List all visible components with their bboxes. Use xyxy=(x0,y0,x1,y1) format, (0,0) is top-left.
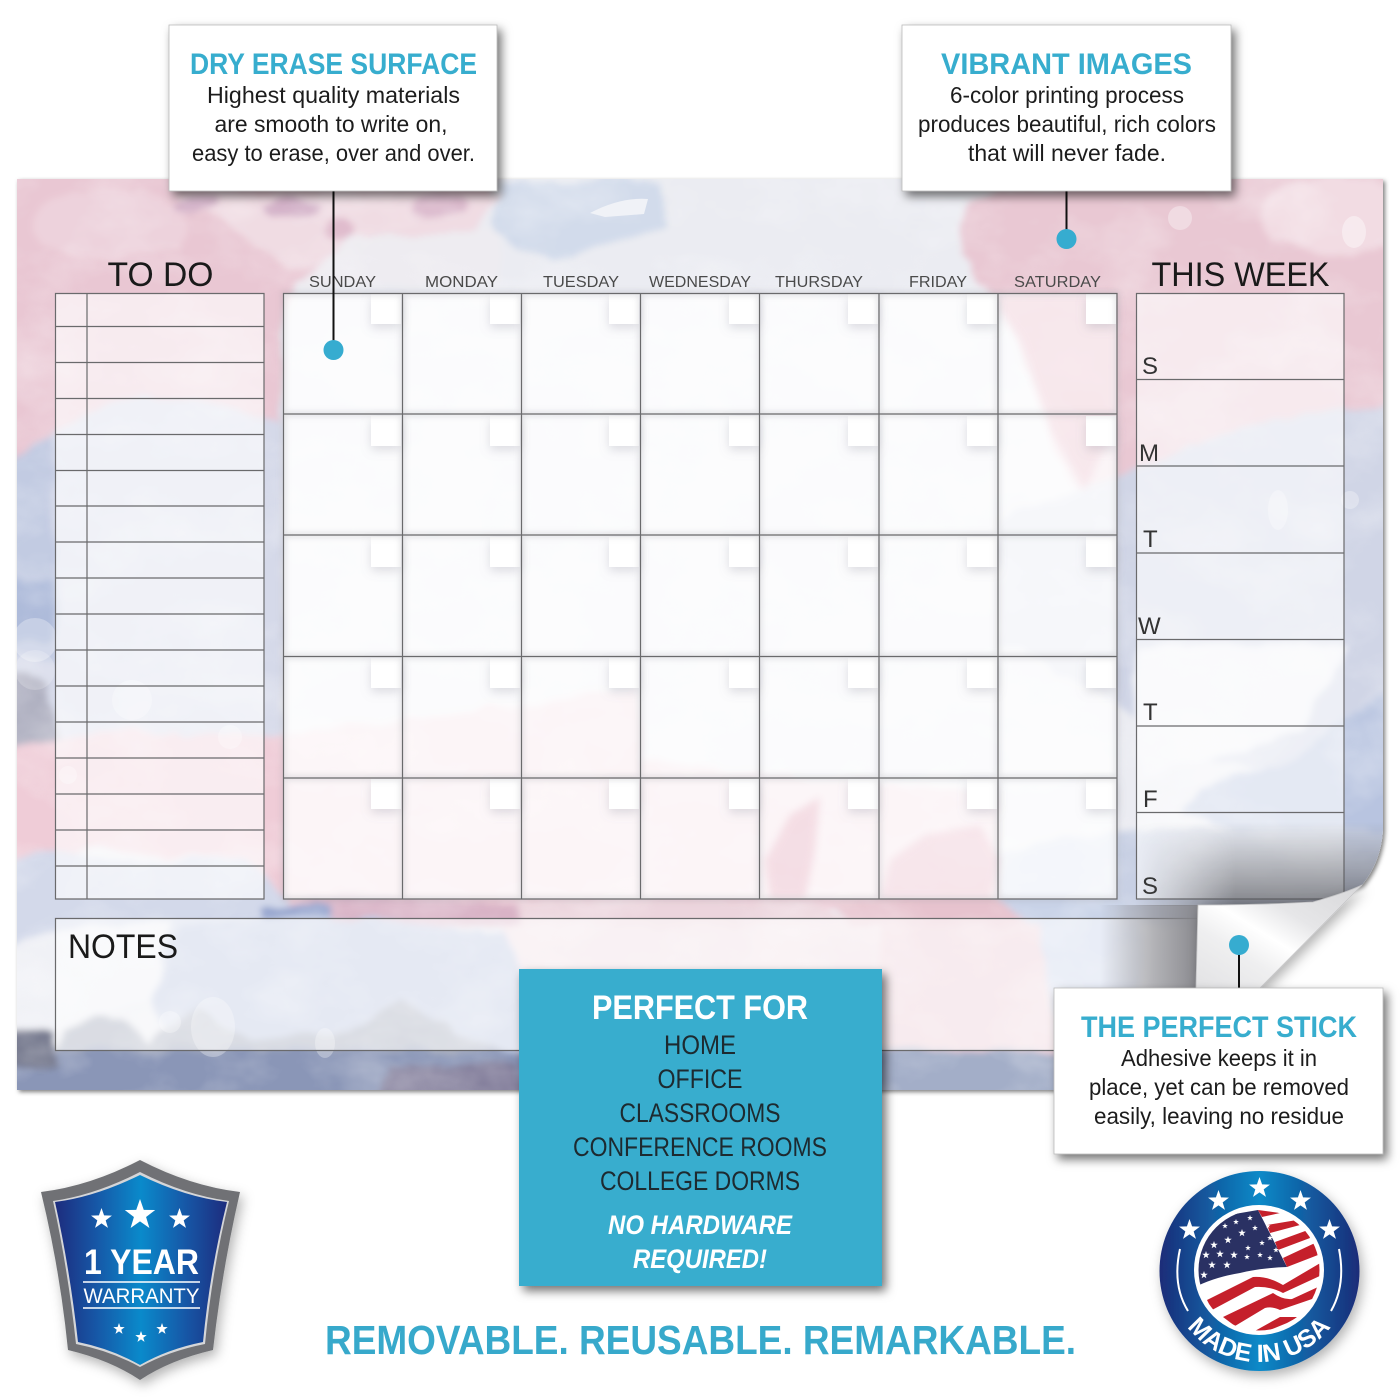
callout text: 6-color printing process xyxy=(950,82,1184,108)
weekday labels: THURSDAY xyxy=(775,274,863,291)
callout box xyxy=(1054,988,1383,1154)
leader line xyxy=(332,190,334,350)
this week day letters: M xyxy=(1139,440,1159,467)
leader dot xyxy=(1229,935,1249,955)
warranty label: WARRANTY xyxy=(84,1285,200,1308)
leader dot xyxy=(324,340,344,360)
weekday labels: SATURDAY xyxy=(1014,274,1101,291)
callout text: produces beautiful, rich colors xyxy=(918,111,1216,137)
callout text: Highest quality materials xyxy=(207,82,460,108)
peeled corner flap xyxy=(1196,885,1362,988)
callout title: DRY ERASE SURFACE xyxy=(190,48,477,81)
places list: HOME xyxy=(664,1030,736,1060)
sheet shadow xyxy=(17,179,1383,1090)
this week day letters: F xyxy=(1143,786,1158,813)
flag xyxy=(1198,1210,1320,1330)
warranty year: 1 YEAR xyxy=(84,1243,199,1282)
weekday labels: MONDAY xyxy=(425,274,498,291)
weekday labels: TUESDAY xyxy=(543,274,619,291)
badge stars xyxy=(1179,1177,1340,1239)
shield face xyxy=(55,1175,227,1365)
callout: the perfect stick xyxy=(1054,935,1383,1154)
page curl shading xyxy=(1106,828,1383,988)
this week day letters: T xyxy=(1143,699,1158,726)
weekday labels: WEDNESDAY xyxy=(649,274,751,291)
leader line xyxy=(1066,190,1068,239)
this week heading: THIS WEEK xyxy=(1152,256,1330,294)
badge: 1 year warranty xyxy=(41,1160,240,1380)
this week day letters: S xyxy=(1142,873,1158,900)
made in usa text: MADE IN USA xyxy=(1188,1316,1331,1362)
this week day letters: W xyxy=(1138,613,1161,640)
no hardware note xyxy=(608,1210,793,1274)
warranty rules xyxy=(83,1282,200,1308)
this week day letters xyxy=(1138,353,1161,900)
callout text: place, yet can be removed xyxy=(1089,1074,1349,1100)
places list: CONFERENCE ROOMS xyxy=(573,1132,827,1162)
callout: vibrant images xyxy=(902,25,1231,249)
to do grid xyxy=(55,293,264,899)
tagline: REMOVABLE. REUSABLE. REMARKABLE. xyxy=(325,1317,1076,1363)
splash marks xyxy=(590,199,648,217)
places list: COLLEGE DORMS xyxy=(600,1166,800,1196)
weekday labels: FRIDAY xyxy=(909,274,967,291)
date squares xyxy=(371,294,1116,809)
leader line xyxy=(1238,945,1240,990)
leader dot xyxy=(1056,229,1076,249)
this week day letters: T xyxy=(1143,526,1158,553)
paint bubbles xyxy=(13,206,1366,1058)
no hardware note: REQUIRED! xyxy=(633,1244,767,1274)
panel: perfect for xyxy=(519,969,882,1286)
places list: CLASSROOMS xyxy=(620,1098,780,1128)
notes heading: NOTES xyxy=(68,928,178,966)
callout: dry erase surface xyxy=(169,25,497,360)
panel title: PERFECT FOR xyxy=(592,989,808,1027)
this week day letters: S xyxy=(1142,353,1158,380)
calendar panel wash xyxy=(55,293,1344,1050)
callout text: easy to erase, over and over. xyxy=(192,140,475,166)
callout title: THE PERFECT STICK xyxy=(1081,1011,1357,1044)
places list: OFFICE xyxy=(658,1064,742,1094)
watercolor background xyxy=(0,150,1400,1130)
callout text xyxy=(918,82,1216,166)
callout text: are smooth to write on, xyxy=(214,111,448,137)
this week grid xyxy=(1136,294,1344,899)
shield frame xyxy=(41,1160,240,1380)
callout text: Adhesive keeps it in xyxy=(1121,1045,1317,1071)
weekday labels xyxy=(309,274,1101,291)
panel background xyxy=(519,969,882,1286)
notes box xyxy=(56,918,1197,1050)
weekday labels: SUNDAY xyxy=(309,274,376,291)
stars xyxy=(91,1199,190,1342)
callout text: that will never fade. xyxy=(968,140,1166,166)
badge disc xyxy=(1160,1171,1360,1371)
callout box xyxy=(902,25,1231,191)
badge: made in usa xyxy=(1156,1169,1370,1383)
calendar sheet xyxy=(0,150,1400,1130)
grid soft glow xyxy=(283,293,1117,899)
no hardware note: NO HARDWARE xyxy=(608,1210,793,1240)
places list xyxy=(573,1030,827,1196)
callout title: VIBRANT IMAGES xyxy=(941,48,1192,81)
shield inner line xyxy=(53,1172,229,1367)
callout text xyxy=(192,82,475,166)
callout text: easily, leaving no residue xyxy=(1094,1103,1344,1129)
callout box xyxy=(169,25,497,191)
calendar grid xyxy=(283,293,1117,899)
badge ring xyxy=(1194,1205,1324,1335)
to do heading: TO DO xyxy=(108,256,214,294)
badge arcs xyxy=(1177,1249,1341,1311)
callout text xyxy=(1089,1045,1349,1129)
